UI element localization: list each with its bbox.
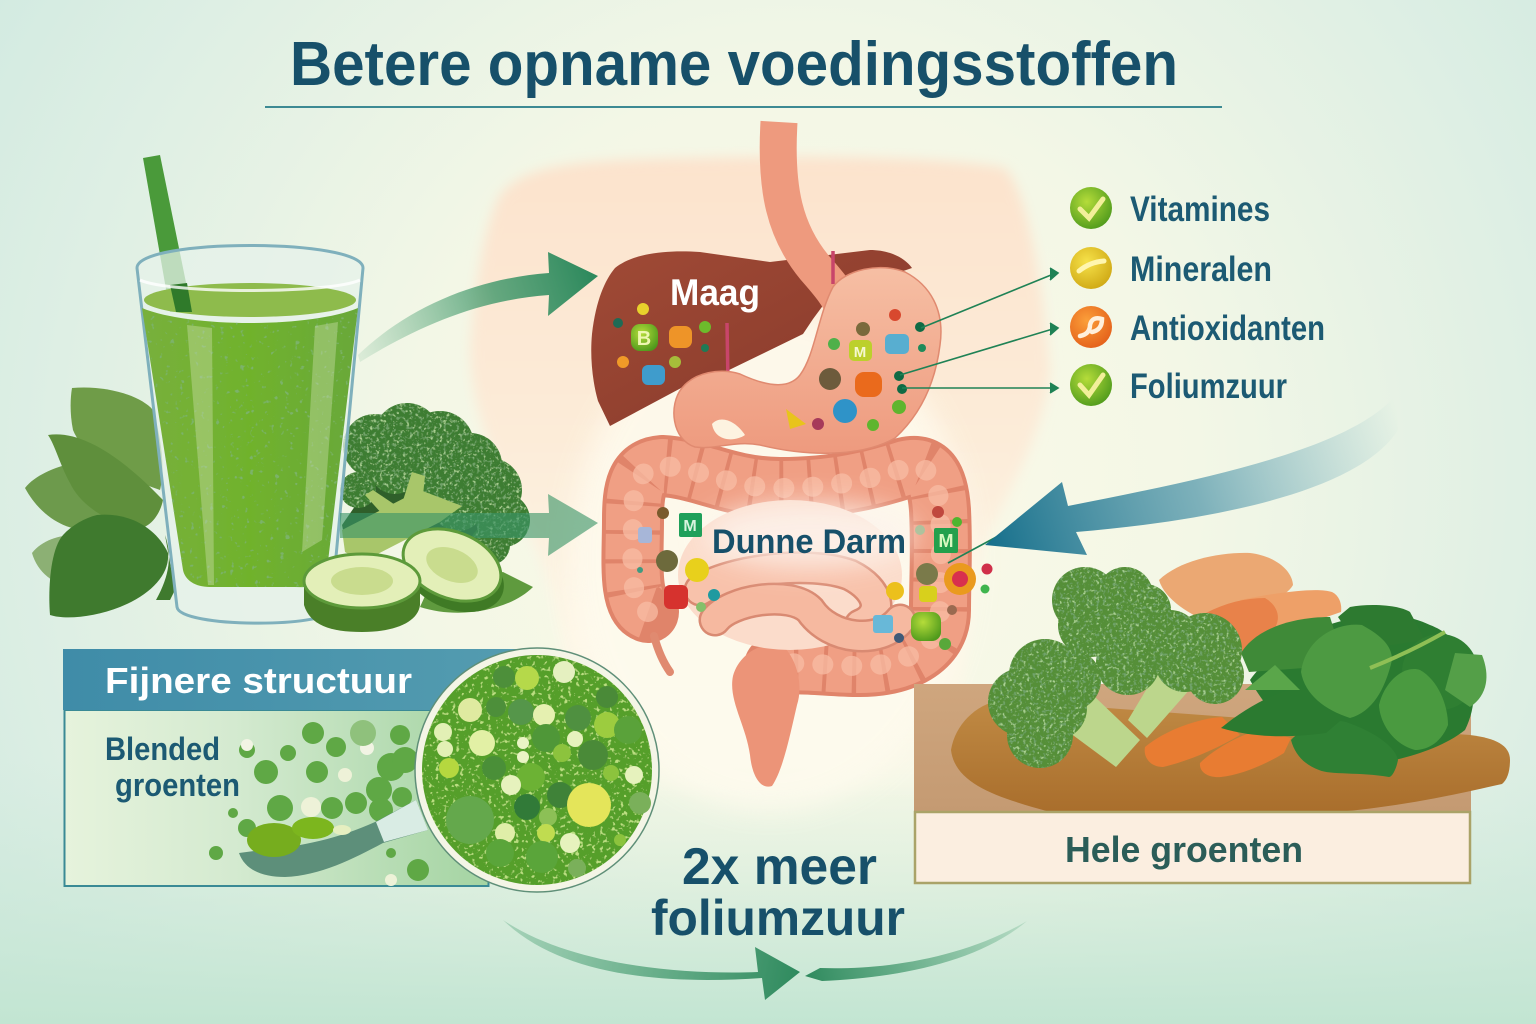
rectum (732, 644, 799, 787)
panel: fijnere structuur (63, 648, 659, 892)
smoothie highlights (187, 322, 338, 585)
broccoli stems (1066, 650, 1198, 767)
panel: hele groenten (914, 553, 1510, 883)
panel text: Blended (105, 731, 220, 767)
panel body (64, 710, 488, 886)
vitamines label: Vitamines (1130, 190, 1270, 229)
callout: 2x meer foliumzuur: foliumzuur (651, 890, 905, 946)
label text: Hele groenten (1065, 829, 1303, 870)
stomach opening (712, 420, 745, 439)
straw (143, 155, 192, 312)
mineralen label: Mineralen (1130, 250, 1272, 289)
body silhouette (470, 157, 1050, 810)
panel text: groenten (115, 767, 240, 803)
spinach (1221, 605, 1486, 777)
icon: vitamines check (1070, 187, 1112, 229)
stomach (674, 268, 941, 453)
nutrient particles: intestine (637, 506, 992, 650)
arrow: bottom left (503, 920, 800, 1000)
glass (137, 246, 363, 623)
esophagus (778, 122, 845, 310)
cucumber slices (304, 515, 515, 632)
label: Maag: Maag (670, 272, 760, 313)
label: Dunne Darm: Dunne Darm (712, 523, 906, 561)
callout: 2x meer foliumzuur (651, 838, 905, 946)
label box (915, 812, 1470, 883)
right broccoli (340, 403, 530, 565)
liver (591, 250, 912, 426)
digestive system (591, 122, 992, 787)
left spinach (25, 387, 175, 617)
icon: foliumzuur check (1070, 364, 1112, 406)
panel text (105, 731, 240, 803)
panel heading: Fijnere structuur (105, 660, 412, 701)
wooden backdrop (914, 684, 1471, 814)
nutrient particles: stomach: M (854, 344, 866, 361)
large intestine (632, 466, 941, 666)
nutrient particles: liver: B (637, 328, 651, 350)
nutrient particles: intestine: M (938, 531, 954, 551)
smoothie surface (144, 283, 356, 317)
arrow: smoothie to stomach (358, 252, 598, 362)
panel header (63, 649, 519, 710)
sweet potatoes (1159, 553, 1341, 653)
foliumzuur label: Foliumzuur (1130, 367, 1287, 406)
small intestine (678, 500, 915, 650)
appendix (654, 636, 670, 672)
carrots (1145, 717, 1291, 777)
glass rim (140, 280, 360, 290)
blended particles (209, 720, 429, 886)
straw in liquid (170, 283, 192, 312)
nutrient particles: intestine: M (683, 518, 697, 535)
arrow: bottom right (805, 921, 1027, 981)
antioxidanten label: Antioxidanten (1130, 309, 1325, 348)
legend: nutrients (1070, 187, 1325, 406)
title: Betere opname voedingsstoffen (290, 30, 1178, 99)
nutrient particles: stomach (786, 309, 926, 431)
arrow: whole vegetables to intestine (985, 395, 1398, 555)
spoon (239, 800, 428, 877)
liver veins (727, 251, 833, 383)
leader lines (900, 268, 1058, 563)
nutrient particles: liver (613, 303, 711, 385)
broccoli florets (988, 567, 1244, 768)
icon: mineralen (1070, 247, 1112, 289)
lettuce under cucumbers (420, 572, 533, 613)
icon: antioxidanten (1070, 306, 1112, 348)
arrow: smoothie to intestine (340, 494, 598, 556)
magnifier (415, 648, 659, 892)
smoothie (142, 308, 358, 587)
wooden board (951, 700, 1510, 812)
smoothie group (25, 155, 598, 632)
callout: 2x meer foliumzuur: 2x meer (682, 838, 877, 896)
